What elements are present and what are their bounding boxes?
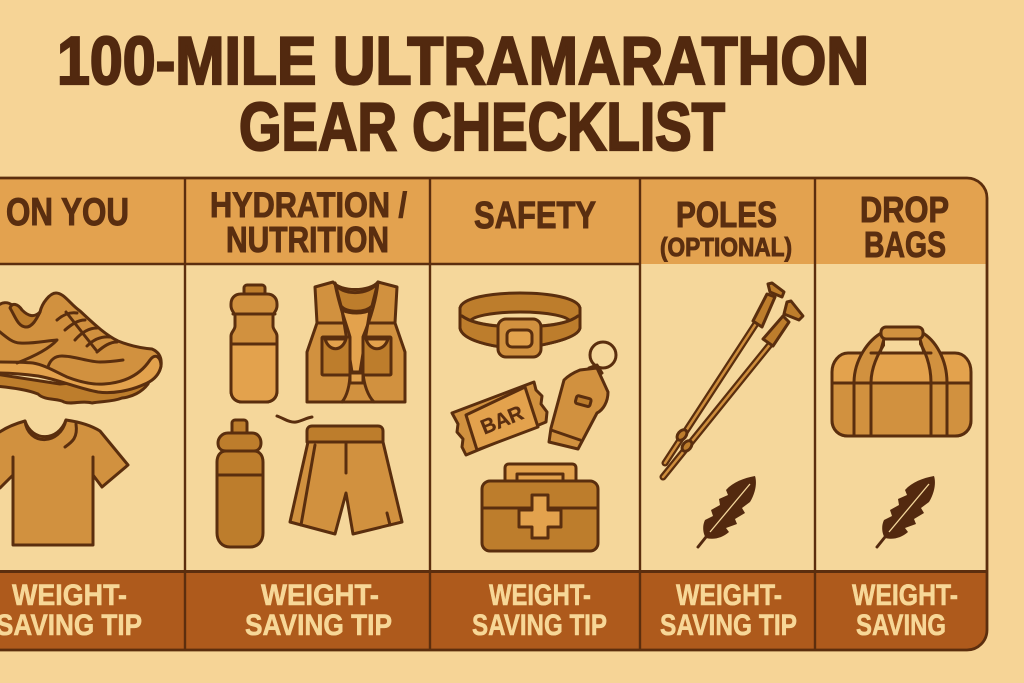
heading: drop bags: DROP [860,189,949,230]
tip: poles: SAVING TIP [660,609,797,642]
icon: water bottle [231,285,277,402]
title: GEAR CHECKLIST [239,89,725,165]
title: 100-MILE ULTRAMARATHON [57,23,869,99]
tip: drop bags: SAVING [856,609,946,642]
icon: energy bar: BAR [477,402,527,439]
panel: hydration and nutrition [210,186,407,547]
tip: on you: WEIGHT- [12,579,127,612]
tip: drop bags: WEIGHT- [852,579,958,612]
tip: on you [0,579,142,642]
tip: safety: WEIGHT- [489,579,591,612]
tip: safety [472,579,607,642]
panel: on you [0,191,161,545]
heading: drop bags: BAGS [864,224,946,265]
tip: safety: SAVING TIP [472,609,607,642]
panel: safety [452,195,616,551]
heading: drop bags [860,189,949,265]
icon: feather [698,476,756,547]
icon: running shorts [290,426,402,534]
heading: poles (optional) [660,194,792,262]
heading: on you: ON YOU [6,191,129,234]
panel: drop bags [832,189,971,547]
checklist table [0,178,987,650]
icon: whistle [549,342,616,449]
footer: weight-saving tips [0,579,958,642]
heading: hydration / nutrition: NUTRITION [226,219,389,260]
icon: feather [877,476,935,547]
icon: headlamp [460,293,580,357]
tip: drop bags [852,579,958,642]
icon: t-shirt [0,420,128,545]
panel: poles [660,194,803,547]
icon: hydration vest [307,282,405,402]
tip: hydration: WEIGHT- [261,579,379,612]
heading: hydration / nutrition: HYDRATION / [210,186,407,225]
tip: hydration [245,579,392,642]
heading: hydration / nutrition [210,186,407,260]
icon: energy bar [452,382,547,455]
tip: on you: SAVING TIP [0,609,142,642]
icon: sports bottle [217,420,263,547]
heading: poles (optional): POLES [676,194,777,235]
icon: duffel bag [832,327,971,436]
icon: first aid kit [482,464,598,551]
icon: trail shoe [0,293,161,403]
squiggle mark [277,416,312,422]
heading: safety: SAFETY [474,195,596,237]
tip: hydration: SAVING TIP [245,609,392,642]
icon: trekking poles [663,283,803,477]
heading: poles (optional): (OPTIONAL) [660,232,792,262]
tip: poles: WEIGHT- [676,579,782,612]
title [57,23,869,165]
tip: poles [660,579,797,642]
